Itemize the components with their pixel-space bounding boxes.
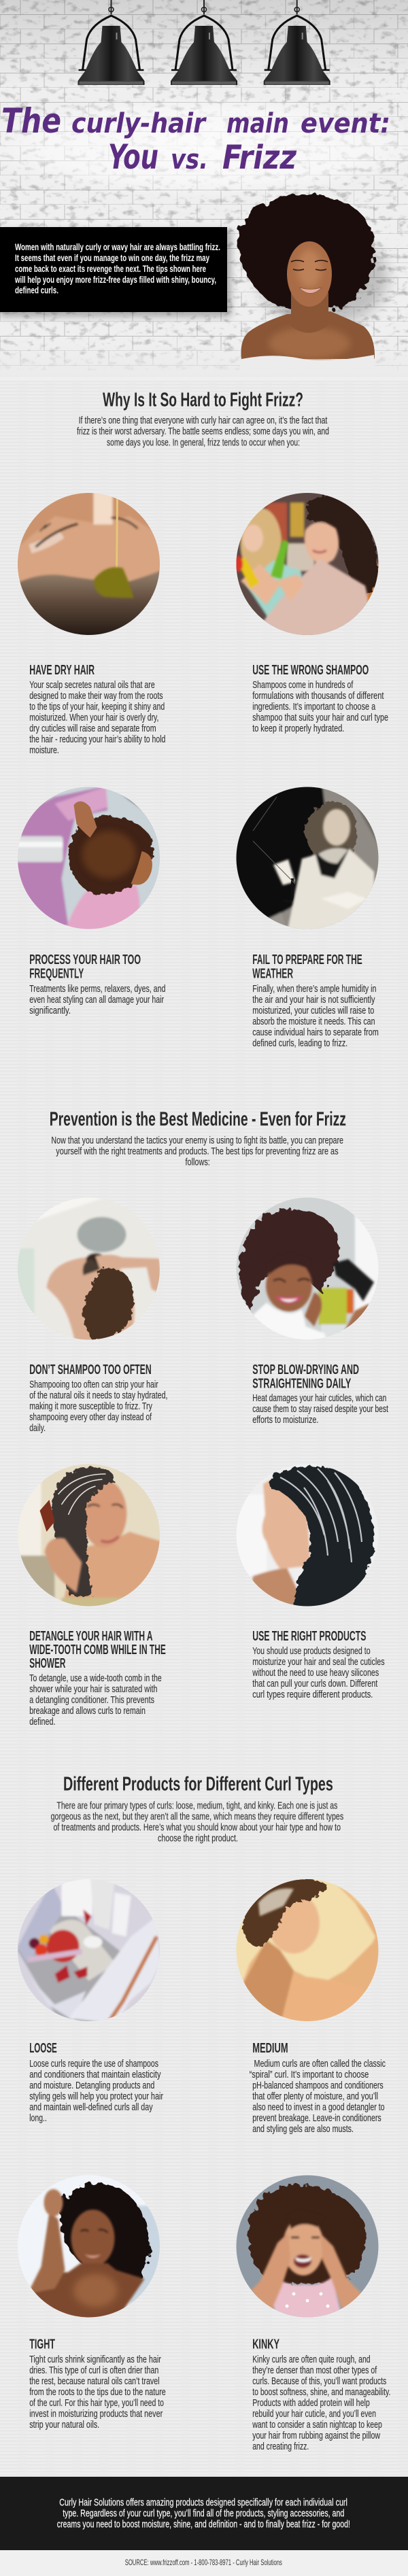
card text: to the tips of your hair, keeping it shiny and bbox=[29, 701, 165, 712]
card: tight: TIGHT bbox=[29, 2337, 55, 2352]
section heading: why is it so hard bbox=[77, 389, 329, 449]
brick wall backdrop bbox=[0, 0, 408, 381]
intro text: Women with naturally curly or wavy hair are always battling frizz. bbox=[15, 241, 220, 252]
card text bbox=[29, 1672, 162, 1728]
card text: Treatments like perms, relaxers, dyes, and bbox=[29, 983, 165, 995]
source strip bbox=[0, 2550, 408, 2576]
card: detangle with a wide-tooth comb bbox=[29, 1629, 166, 1728]
card text: of the curl. For this hair type, you’ll need to bbox=[29, 2397, 164, 2409]
card: fail to prepare for the weather bbox=[252, 952, 379, 1049]
photo: woman washing hair in shower bbox=[14, 1194, 163, 1343]
card text: breakage and allows curls to remain bbox=[29, 1705, 146, 1717]
card text bbox=[29, 2058, 163, 2124]
footer call-to-action band bbox=[0, 2477, 408, 2550]
photo: woman with tight curls looking up bbox=[14, 2171, 163, 2321]
card text: designed to make their way from the roots bbox=[29, 690, 163, 702]
title: event: bbox=[301, 108, 390, 139]
intro text: It seems that even if you manage to win one day, the frizz may bbox=[15, 252, 209, 263]
section intro text bbox=[51, 1800, 343, 1844]
card text: Shampooing too often can strip your hair bbox=[29, 1379, 158, 1390]
title: Frizz bbox=[222, 139, 297, 177]
card text bbox=[252, 983, 379, 1049]
card: use the wrong shampoo bbox=[252, 663, 388, 734]
card: stop blow-drying and straightening daily: STRAIGHTENING DAILY bbox=[252, 1376, 352, 1391]
intro text bbox=[14, 241, 220, 295]
section heading: why is it so hard: Why Is It So Hard to Fight Frizz? bbox=[103, 389, 303, 411]
section intro text: choose the right product. bbox=[158, 1833, 238, 1844]
icon: lamp centre bbox=[171, 0, 237, 85]
section intro text: follows: bbox=[185, 1156, 210, 1168]
card text: and creating frizz. bbox=[252, 2441, 309, 2452]
card: use the right products bbox=[252, 1629, 385, 1700]
photo: woman blow-drying curly hair bbox=[237, 1198, 378, 1339]
card: have dry hair: HAVE DRY HAIR bbox=[29, 663, 95, 678]
card text bbox=[29, 983, 165, 1016]
card text: moisture. bbox=[29, 744, 59, 756]
card: medium: MEDIUM bbox=[252, 2041, 288, 2056]
card: loose bbox=[29, 2041, 163, 2124]
section heading: different products bbox=[51, 1774, 343, 1844]
card: kinky bbox=[252, 2337, 390, 2452]
card: process your hair too frequently: FREQUENTLY bbox=[29, 967, 84, 982]
section intro text bbox=[77, 415, 329, 449]
card text: making it more susceptible to frizz. Try bbox=[29, 1401, 152, 1412]
section intro text bbox=[51, 1135, 343, 1168]
source strip: SOURCE: www.frizzoff.com - 1-800-783-8971 - Curly Hair Solutions bbox=[125, 2558, 282, 2567]
title: main bbox=[226, 108, 289, 139]
card text bbox=[252, 2354, 390, 2452]
card text: Loose curls require the use of shampoos bbox=[29, 2058, 158, 2070]
photo: woman lathering hair in shower bbox=[233, 1875, 382, 2025]
card: medium bbox=[250, 2041, 386, 2135]
card: detangle with a wide-tooth comb: WIDE-TOOTH COMB WHILE IN THE bbox=[29, 1643, 166, 1658]
card text: defined curls, leading to frizz. bbox=[252, 1037, 347, 1049]
icon: three hanging lamps bbox=[78, 0, 330, 85]
icon: lamp left bbox=[78, 0, 144, 85]
footer text bbox=[57, 2497, 350, 2530]
section intro text: some days you lose. In general, frizz tends to occur when you: bbox=[107, 436, 300, 449]
photo: woman with umbrella in wind (black and white) bbox=[233, 783, 382, 933]
title: You bbox=[108, 137, 158, 177]
card: fail to prepare for the weather: WEATHER bbox=[252, 967, 293, 982]
card text: shampooing every other day instead of bbox=[29, 1411, 152, 1423]
intro text: defined curls. bbox=[15, 284, 58, 295]
card: detangle with a wide-tooth comb: SHOWER bbox=[29, 1656, 66, 1671]
card text: long.. bbox=[29, 2112, 47, 2124]
card: don't shampoo too often bbox=[29, 1362, 168, 1434]
card text bbox=[252, 1392, 389, 1426]
card text: defined. bbox=[29, 1716, 56, 1728]
card text: from the roots to the tips due to the nature bbox=[29, 2386, 166, 2398]
card: process your hair too frequently bbox=[29, 952, 165, 1016]
card text bbox=[252, 1645, 385, 1700]
card text: Tight curls shrink significantly as the hair bbox=[29, 2354, 161, 2365]
intro text: come back to exact its revenge the next. The tips shown here bbox=[15, 263, 206, 274]
card text: “spiral” curl. It’s important to choose bbox=[250, 2069, 369, 2080]
card text: Shampoos come in hundreds of bbox=[252, 679, 354, 691]
section heading: prevention bbox=[50, 1109, 346, 1168]
card: detangle with a wide-tooth comb: DETANGLE YOUR HAIR WITH A bbox=[29, 1629, 153, 1644]
card text: shower while your hair is saturated with bbox=[29, 1683, 158, 1695]
card text bbox=[29, 1379, 168, 1434]
card text: To detangle, use a wide-tooth comb in the bbox=[29, 1672, 162, 1684]
photo: woman combing conditioner through hair bbox=[18, 1464, 160, 1606]
card text: even heat styling can all damage your hair bbox=[29, 994, 164, 1006]
card text: the hair - reducing your hair’s ability to hold bbox=[29, 734, 165, 745]
card text: dry cuticles will raise and separate from bbox=[29, 723, 156, 734]
card text bbox=[29, 679, 165, 756]
card: tight bbox=[29, 2337, 166, 2431]
card: kinky: KINKY bbox=[252, 2337, 279, 2352]
card text: to keep it properly hydrated. bbox=[252, 723, 344, 734]
photo: basket of hair products bbox=[18, 1879, 160, 2021]
card text: invest in moisturizing products that never bbox=[29, 2408, 163, 2420]
hero photo: smiling woman with curly hair bbox=[238, 194, 388, 371]
photo: women choosing shampoo bbox=[233, 490, 382, 639]
card text: and conditioners that maintain elasticity bbox=[29, 2069, 161, 2080]
intro text: will help you enjoy more frizz-free days filled with shiny, bouncy, bbox=[14, 274, 216, 285]
card: loose: LOOSE bbox=[29, 2041, 57, 2056]
card text: efforts to moisturize. bbox=[252, 1414, 318, 1426]
card text: strip your natural oils. bbox=[29, 2419, 99, 2431]
card: don't shampoo too often: DON’T SHAMPOO TOO OFTEN bbox=[29, 1362, 152, 1377]
card: have dry hair bbox=[29, 663, 165, 756]
card text: daily. bbox=[29, 1422, 46, 1434]
card text: and moisture. Detangling products and bbox=[29, 2080, 154, 2091]
icon: lamp right bbox=[264, 0, 330, 85]
photo: oil dripping on scalp bbox=[14, 490, 163, 639]
card: process your hair too frequently: PROCESS YOUR HAIR TOO bbox=[29, 952, 141, 967]
card text: and styling gels are also musts. bbox=[252, 2123, 354, 2135]
title: vs. bbox=[171, 144, 208, 175]
card text: of the natural oils it needs to stay hydrated, bbox=[29, 1390, 168, 1401]
card text: a detangling conditioner. This prevents bbox=[29, 1694, 154, 1706]
photo: blow-drying curly hair in salon bbox=[14, 783, 163, 933]
intro panel bbox=[0, 227, 231, 317]
photo: conditioner in long dark hair bbox=[237, 1464, 378, 1606]
title bbox=[1, 101, 390, 177]
photo: laughing woman with kinky curls bbox=[233, 2171, 382, 2321]
card text bbox=[252, 679, 388, 734]
card text: Your scalp secretes natural oils that are bbox=[29, 679, 155, 691]
card text: significantly. bbox=[29, 1005, 71, 1016]
card text bbox=[250, 2058, 386, 2135]
title: The bbox=[1, 101, 61, 141]
card text bbox=[29, 2354, 166, 2431]
card text: and maintain well-defined curls all day bbox=[29, 2101, 153, 2113]
card text: styling gels will help you protect your hair bbox=[29, 2091, 163, 2102]
card text: moisturized. When your hair is overly dry, bbox=[29, 712, 158, 723]
card: stop blow-drying and straightening daily bbox=[252, 1362, 389, 1426]
card text: dries. This type of curl is often drier than bbox=[29, 2365, 158, 2376]
title: curly-hair bbox=[71, 108, 207, 139]
card text: the rest, because natural oils can’t travel bbox=[29, 2375, 160, 2387]
